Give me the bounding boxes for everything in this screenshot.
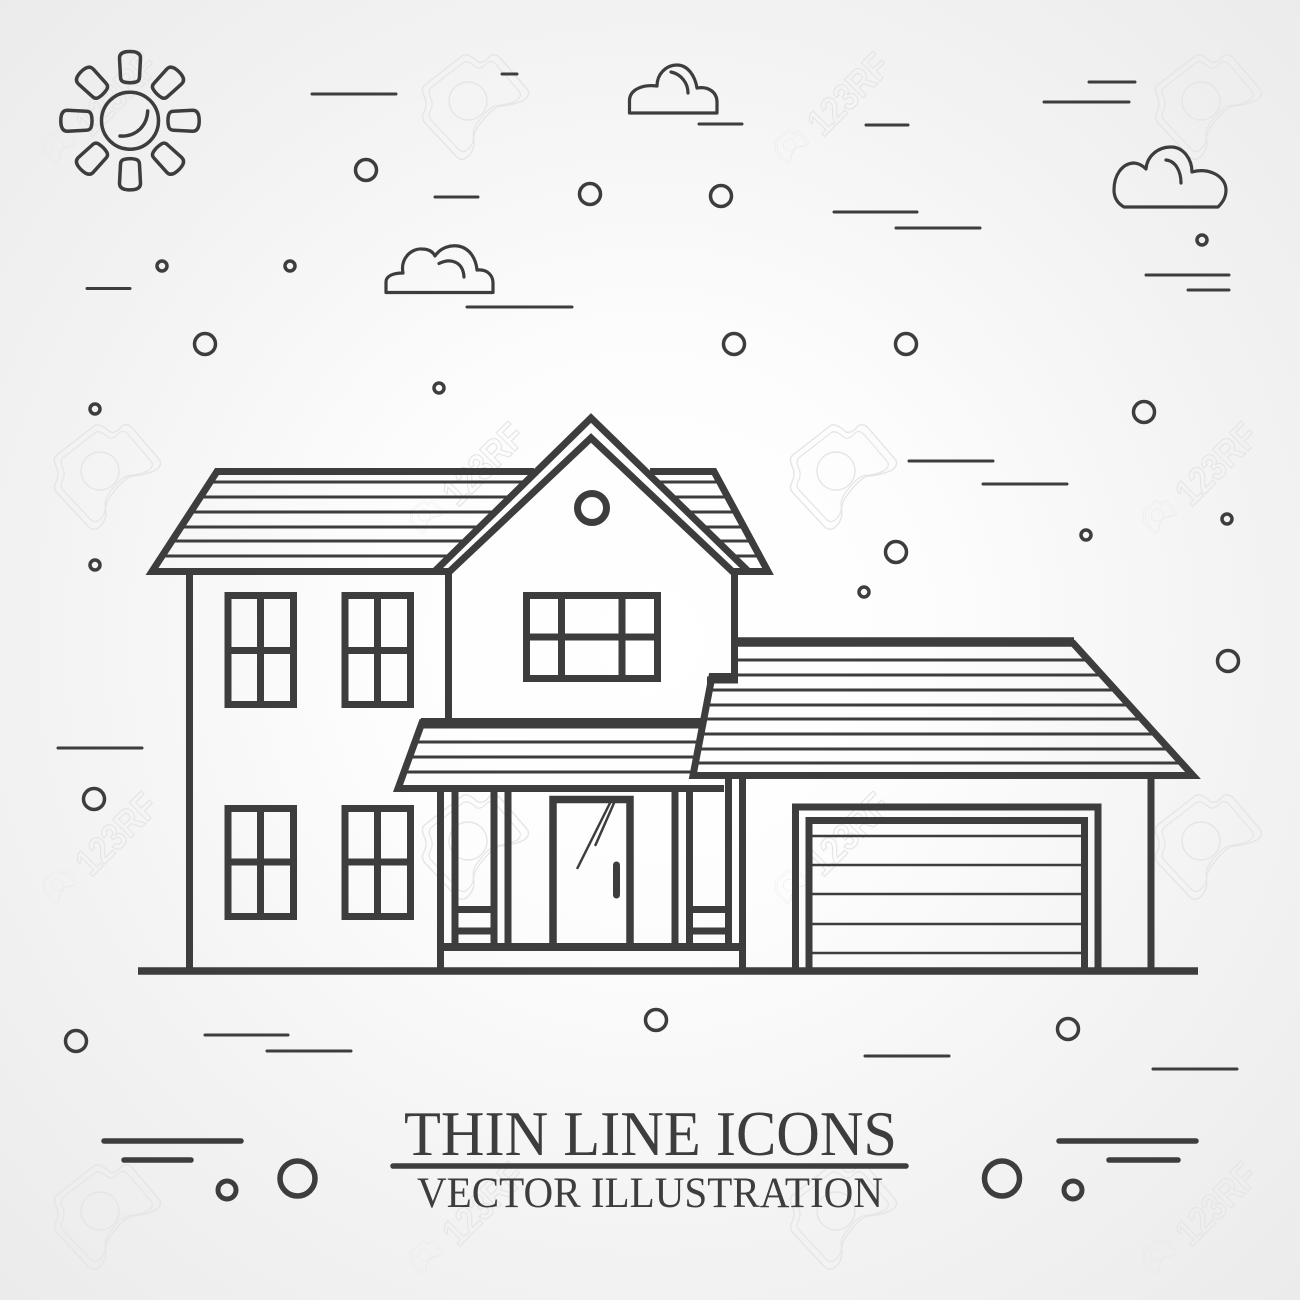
watermarks: 123RF [68, 45, 167, 144]
porch floor [444, 943, 740, 951]
main roof [152, 472, 768, 572]
watermarks: 123RF [435, 415, 534, 514]
watermarks: 123RF [435, 1155, 534, 1254]
watermarks: 123RF [1168, 1155, 1267, 1254]
icon: cloud top right [1114, 147, 1226, 207]
decorative circles [66, 160, 1238, 1052]
footer accents left [104, 1141, 315, 1199]
watermarks: 123RF [800, 45, 899, 144]
round attic window [578, 494, 606, 522]
porch posts and railing [455, 779, 728, 943]
front gable [434, 418, 749, 573]
watermarks: 123RF [68, 785, 167, 884]
house walls [190, 573, 734, 970]
front door [553, 800, 630, 945]
lower left window [228, 808, 294, 917]
icon: cloud top centre [630, 65, 717, 113]
garage wall [742, 779, 1151, 970]
house illustration [138, 418, 1198, 971]
title underline [393, 1163, 906, 1169]
upper middle window [345, 595, 410, 705]
subtitle: VECTOR ILLUSTRATION [417, 1170, 883, 1217]
icon: sun [61, 52, 199, 190]
garage roof [693, 642, 1193, 776]
icon: cloud lower left [386, 246, 493, 292]
upper left window [228, 595, 294, 705]
upper gable window [526, 595, 658, 679]
watermarks: 123RF [800, 785, 899, 884]
title: THIN LINE ICONS [404, 1098, 897, 1169]
decorative sky and ground dashes [58, 74, 1237, 1069]
garage door [796, 807, 1098, 970]
lower middle window [345, 808, 410, 917]
watermarks: 123RF [1168, 415, 1267, 514]
porch roof [398, 720, 724, 788]
footer accents right [984, 1141, 1196, 1199]
ground line [138, 967, 1198, 975]
